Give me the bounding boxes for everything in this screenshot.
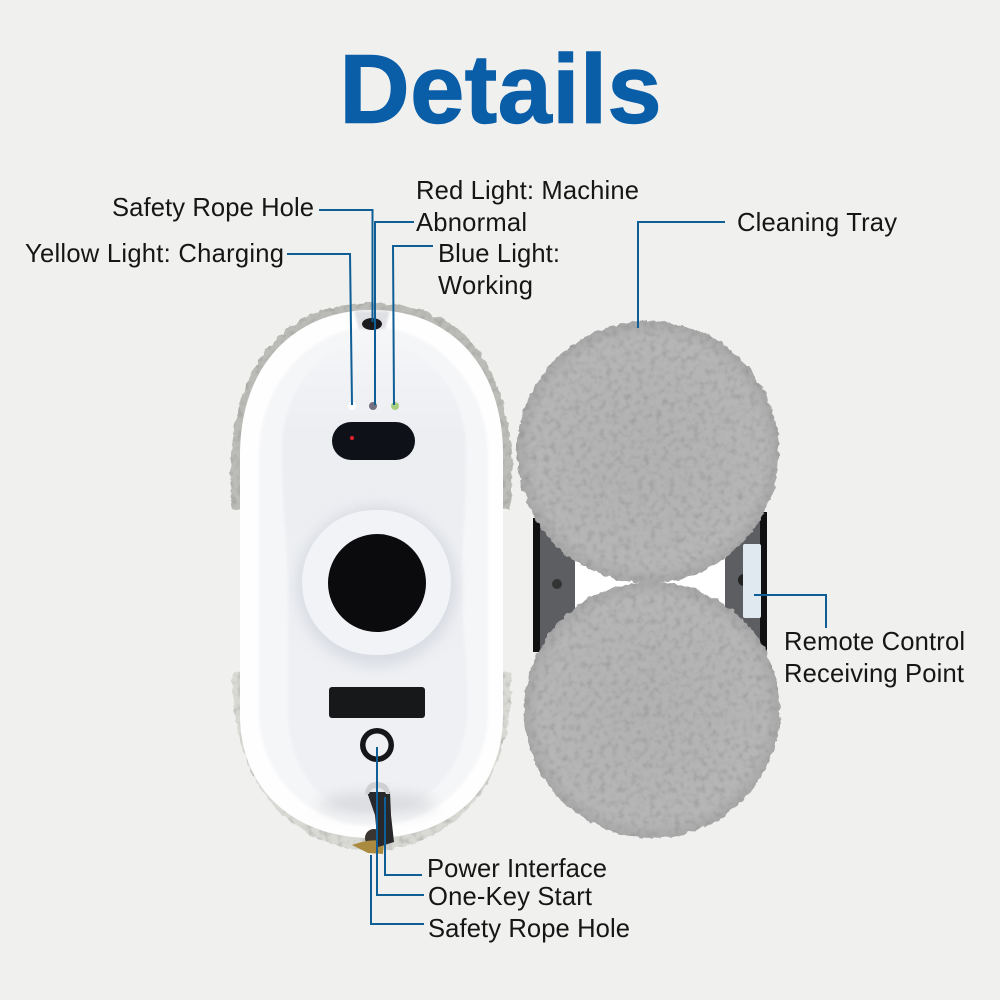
- bottom black window: [329, 687, 425, 718]
- inner panel: [282, 342, 467, 813]
- callout: red light: [375, 177, 639, 405]
- shadow near plug: [319, 792, 435, 816]
- power plug: [352, 782, 394, 854]
- callout: yellow light: Yellow Light: Charging: [25, 240, 284, 268]
- callout: safety rope hole bottom: [371, 855, 630, 943]
- callout: safety rope hole top: Safety Rope Hole: [112, 194, 314, 222]
- red light indicator: [369, 402, 377, 410]
- tray bracket: [533, 512, 767, 652]
- callout: cleaning tray: Cleaning Tray: [737, 209, 897, 237]
- callout: blue light: Working: [438, 272, 533, 300]
- blue light indicator: [391, 402, 399, 410]
- upper cleaning pad: [517, 321, 779, 583]
- callout: one-key start: One-Key Start: [428, 883, 592, 911]
- rope hole: [362, 318, 382, 330]
- callout: yellow light: [25, 240, 352, 405]
- callout: remote control receiving point: Receiving Point: [784, 660, 964, 688]
- remote control receiver strip: [743, 544, 761, 618]
- center sensor disc: [328, 534, 426, 632]
- callout: remote control receiving point: Remote Control: [784, 628, 965, 656]
- robot: window cleaner front view: [231, 303, 512, 854]
- yellow light indicator: [348, 402, 356, 410]
- callout: cleaning tray: [638, 209, 897, 328]
- lower cleaning pad: [524, 582, 780, 838]
- shell inner band: [259, 327, 488, 826]
- bottom mop pad: [233, 672, 511, 850]
- top mop pad: [231, 303, 512, 510]
- callout: red light: Red Light: Machine: [416, 177, 639, 205]
- callout: safety rope hole bottom: Safety Rope Hole: [428, 915, 630, 943]
- callout: power interface: [385, 797, 607, 883]
- cleaning tray: [517, 321, 780, 838]
- display window: [332, 422, 415, 460]
- callout: blue light: Blue Light:: [438, 240, 560, 268]
- callout: blue light: [393, 240, 560, 405]
- red dot: [350, 436, 354, 440]
- robot body shell: [240, 310, 503, 838]
- shadow around center ring: [297, 506, 457, 666]
- callout: power interface: Power Interface: [427, 855, 607, 883]
- callout: red light: Abnormal: [416, 209, 527, 237]
- callout: remote control receiving point: [754, 595, 965, 688]
- title: Details: [340, 34, 662, 144]
- callout: safety rope hole top: [112, 194, 372, 322]
- one-key start button: [360, 728, 394, 762]
- callout: one-key start: [377, 747, 592, 911]
- rope hole recess: [354, 311, 390, 329]
- center ring: [302, 510, 451, 655]
